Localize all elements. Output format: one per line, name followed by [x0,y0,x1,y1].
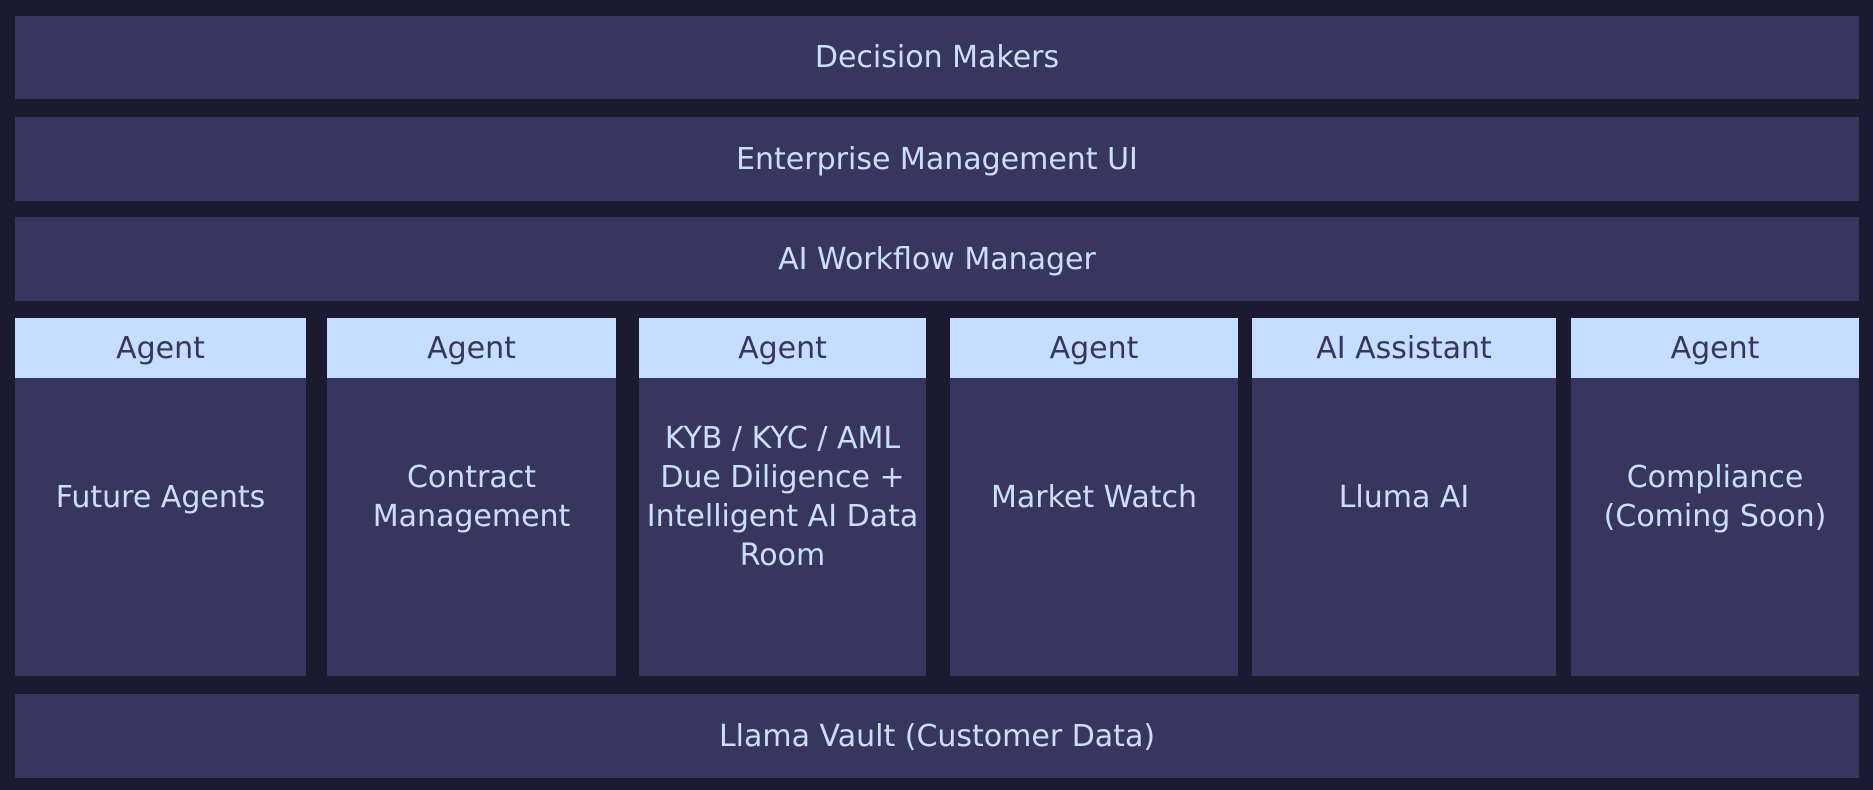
column: KYB KYC AML: Intelligent AI Data [647,499,918,534]
column: future agents: Future Agents [56,480,265,514]
column: future agents: Agent [116,330,205,366]
column: lluma AI: AI Assistant [1316,330,1492,366]
layer: llama vault: Llama Vault (Customer Data) [719,718,1155,754]
column: future agents [15,318,306,676]
column: lluma AI [1252,318,1556,676]
column: KYB KYC AML [639,318,926,676]
layer: enterprise management UI: Enterprise Management UI [736,142,1138,176]
column: KYB KYC AML: KYB / KYC / AML [665,421,900,456]
column: contract management: Contract [407,460,536,495]
column: KYB KYC AML: Due Diligence + [660,460,905,495]
column: compliance [1571,318,1859,676]
column: compliance: Agent [1671,330,1759,366]
column: contract management [327,318,616,676]
column: market watch: Market Watch [991,480,1197,514]
layer: decision makers [15,16,1859,99]
column: KYB KYC AML: Agent [738,330,827,366]
column: market watch [950,318,1238,676]
layer: AI workflow manager [15,217,1859,301]
column: compliance: (Coming Soon) [1604,499,1826,534]
layer: llama vault [15,694,1859,778]
layer: AI workflow manager: AI Workflow Manager [778,242,1096,276]
column: contract management: Agent [427,330,516,366]
column: lluma AI: Lluma AI [1339,480,1469,514]
layer: enterprise management UI [15,117,1859,201]
column: market watch: Agent [1050,330,1138,366]
column: contract management: Management [373,499,570,534]
layer: decision makers: Decision Makers [815,40,1059,75]
column: compliance: Compliance [1627,460,1803,495]
column: KYB KYC AML: Room [740,538,825,573]
